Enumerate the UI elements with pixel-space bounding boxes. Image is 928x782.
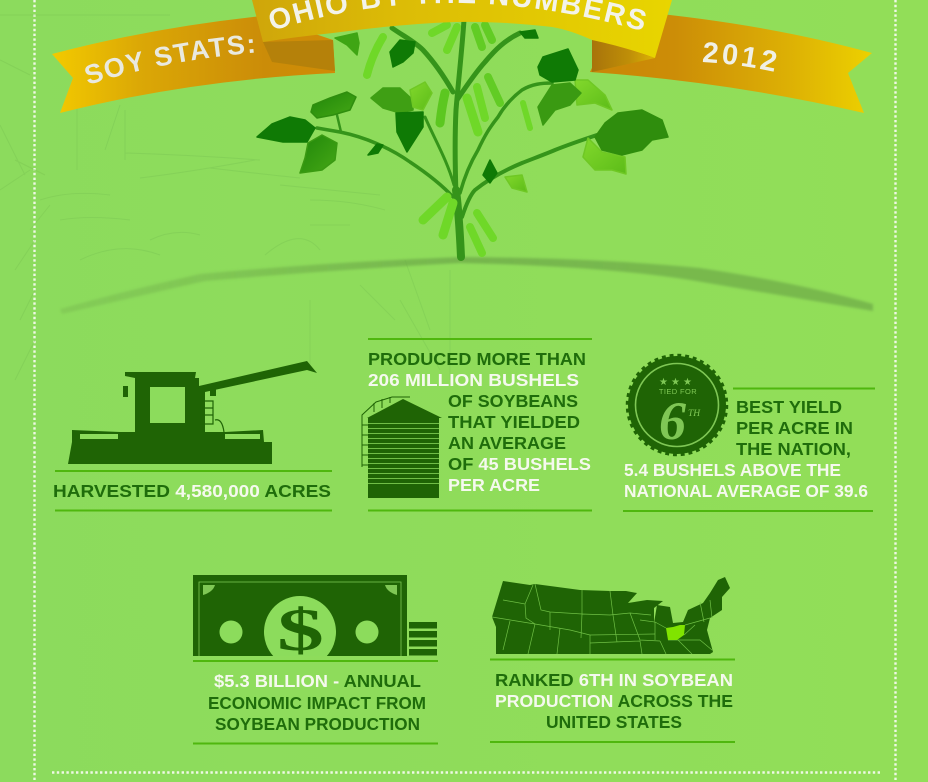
icon: tied for 6th badge: 6 bbox=[659, 391, 686, 451]
faint ghost artifacts bbox=[0, 15, 450, 380]
ground shadow bbox=[60, 257, 873, 314]
caption: SOYBEAN PRODUCTION bbox=[215, 714, 420, 734]
caption: UNITED STATES bbox=[546, 712, 682, 732]
soybean plant bbox=[257, 20, 668, 257]
icon: grain silo bbox=[362, 397, 442, 498]
caption bbox=[624, 397, 868, 501]
icon: tied for 6th badge: ★★★ bbox=[659, 377, 695, 388]
title: soy stats: SOY STATS: bbox=[85, 36, 254, 84]
caption bbox=[208, 671, 426, 734]
icon: tied for 6th badge: TH bbox=[688, 409, 701, 419]
ribbon fold: right bbox=[592, 38, 655, 72]
caption: OF 45 BUSHELS bbox=[448, 454, 591, 474]
panel: economic impact bbox=[193, 575, 438, 744]
caption bbox=[368, 349, 591, 495]
highlighted state: ohio bbox=[666, 625, 685, 640]
caption: HARVESTED 4,580,000 ACRES bbox=[53, 481, 331, 501]
panel: yield rank bbox=[623, 356, 875, 512]
icon: bill stack bbox=[409, 622, 437, 656]
caption bbox=[495, 670, 733, 732]
caption: PRODUCED MORE THAN bbox=[368, 349, 586, 369]
icon: dollar bill bbox=[193, 575, 407, 663]
caption: THE NATION, bbox=[736, 439, 851, 459]
caption: OF SOYBEANS bbox=[448, 391, 578, 411]
icon: tied for 6th badge bbox=[628, 356, 726, 454]
icon: united states map bbox=[492, 577, 730, 654]
caption: RANKED 6TH IN SOYBEAN bbox=[495, 670, 733, 690]
caption: AN AVERAGE bbox=[448, 433, 566, 453]
caption: PER ACRE bbox=[448, 475, 540, 495]
caption: NATIONAL AVERAGE OF 39.6 bbox=[624, 481, 868, 501]
icon: combine harvester bbox=[68, 361, 317, 464]
ribbon: right tail bbox=[590, 10, 872, 113]
panel: national rank bbox=[490, 577, 735, 743]
title: year: 2012 bbox=[702, 42, 776, 72]
icon: tied for 6th badge: TIED FOR bbox=[659, 387, 697, 396]
caption: 5.4 BUSHELS ABOVE THE bbox=[624, 460, 841, 480]
panel: bushels produced bbox=[362, 338, 592, 512]
panel: harvested acres bbox=[53, 361, 332, 512]
caption: $5.3 BILLION - ANNUAL bbox=[214, 671, 421, 691]
caption: BEST YIELD bbox=[736, 397, 842, 417]
stems bbox=[317, 20, 597, 257]
caption: ECONOMIC IMPACT FROM bbox=[208, 693, 426, 713]
ribbon fold: left bbox=[263, 40, 335, 71]
leaves bbox=[257, 30, 668, 192]
pods bbox=[367, 25, 530, 253]
caption: PRODUCTION ACROSS THE bbox=[495, 691, 733, 711]
caption: THAT YIELDED bbox=[448, 412, 580, 432]
caption: PER ACRE IN bbox=[736, 418, 853, 438]
icon: dollar bill: $ bbox=[277, 597, 324, 663]
caption: 206 MILLION BUSHELS bbox=[368, 370, 579, 390]
rule bbox=[55, 470, 332, 472]
ribbon: center banner bbox=[252, 0, 672, 58]
ribbon: left tail bbox=[52, 16, 335, 113]
